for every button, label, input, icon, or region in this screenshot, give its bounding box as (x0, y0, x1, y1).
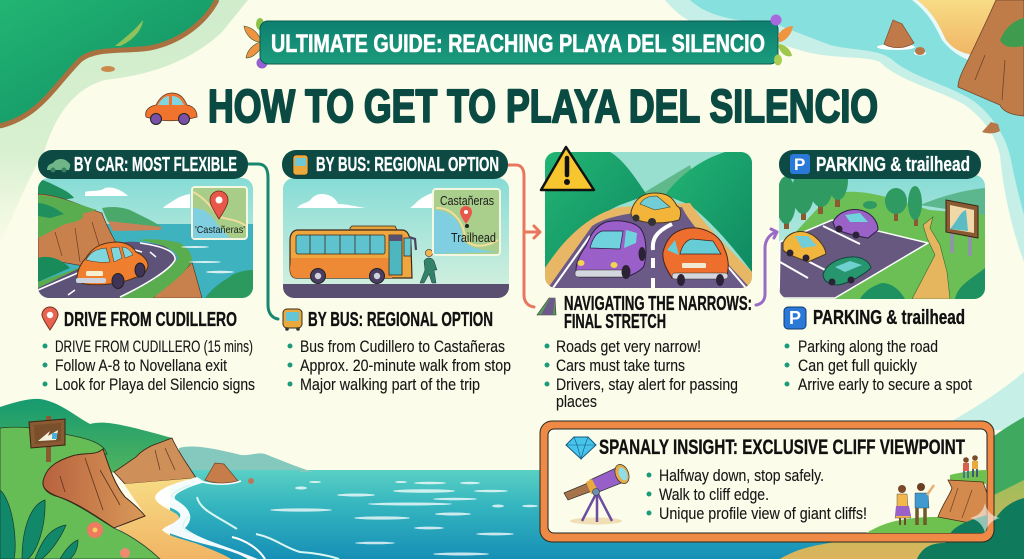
list: narrow road tips: Roads get very narrow! (556, 337, 701, 356)
list: car directions: Follow A-8 to Novellana exit (55, 356, 227, 375)
icon: road (537, 298, 556, 315)
heading: drive from cudillero: DRIVE FROM CUDILLERO (64, 308, 237, 331)
list: parking tips: Can get full quickly (798, 356, 917, 375)
panel: by car (38, 150, 255, 394)
panel: navigating the narrows (537, 147, 752, 411)
list: parking tips: Arrive early to secure a spot (798, 375, 972, 394)
parking illustration (779, 175, 985, 299)
yellow car (783, 232, 826, 262)
orange car (76, 242, 148, 288)
panel: by bus (282, 150, 511, 394)
map inset: 'Castañeras' (195, 224, 245, 236)
heading: navigating the narrows: FINAL STRETCH (564, 311, 666, 333)
list: narrow road tips: Cars must take turns (556, 356, 685, 375)
heading: parking: PARKING & trailhead (813, 306, 965, 329)
icon: parking sign (784, 307, 806, 329)
parking header pill: P (794, 155, 805, 174)
purple car (833, 210, 878, 238)
purple car (575, 221, 646, 279)
trail sign (946, 200, 978, 256)
icon: location pin (42, 307, 58, 330)
icon: telescope (564, 462, 632, 524)
by bus header pill: BY BUS: REGIONAL OPTION (316, 154, 499, 176)
bottom-right land (780, 417, 1024, 559)
list: bus directions: Major walking part of the trip (300, 375, 480, 394)
list: parking tips: Parking along the road (798, 337, 938, 356)
arrow: car to bus (248, 164, 278, 319)
list: bus directions: Approx. 20-minute walk from stop (300, 356, 511, 375)
yellow car (631, 193, 681, 226)
orange car (663, 228, 728, 286)
by car header pill (38, 150, 248, 179)
heading: navigating the narrows: NAVIGATING THE NARROWS: (564, 293, 752, 315)
map inset (192, 187, 247, 239)
icon: warning triangle (541, 147, 594, 190)
icon: orange car (146, 93, 197, 124)
list: narrow road tips: places (556, 392, 597, 411)
icon: bus (283, 309, 302, 331)
sea wave highlights (270, 481, 538, 556)
list: parking tips (784, 337, 972, 394)
map inset (433, 189, 500, 255)
parking header pill: PARKING & trailhead (816, 154, 970, 176)
list: car directions: Look for Playa del Silencio signs (55, 375, 255, 394)
list: insight tips (646, 466, 867, 523)
list: insight tips: Walk to cliff edge. (659, 485, 769, 504)
top banner (244, 14, 793, 68)
top banner: ULTIMATE GUIDE: REACHING PLAYA DEL SILENCIO (271, 30, 765, 58)
by car header pill: BY CAR: MOST FLEXIBLE (74, 154, 237, 176)
list: car directions: DRIVE FROM CUDILLERO (15 mins) (55, 337, 253, 356)
car scene illustration (38, 178, 253, 298)
heading: by bus: BY BUS: REGIONAL OPTION (308, 308, 493, 331)
green car (823, 257, 871, 286)
icon: sparkle (970, 503, 1000, 533)
icon: diamond (566, 437, 596, 459)
sea (290, 470, 1024, 559)
parking header pill (779, 150, 981, 179)
list: narrow road tips: Drivers, stay alert for passing (556, 375, 738, 394)
heading: navigating the narrows (564, 293, 752, 333)
arrow: narrows to parking (756, 229, 777, 305)
cliff viewpoint illustration (865, 470, 987, 534)
right mist above the land (950, 372, 1024, 430)
by bus header pill (282, 150, 508, 179)
narrow road illustration (545, 152, 752, 288)
map inset: Trailhead (451, 231, 496, 245)
list: insight tips: Unique profile view of giant cliffs! (659, 504, 867, 523)
top-left jungle corner (0, 0, 248, 245)
callout: insight box (540, 421, 994, 542)
list: narrow road tips (544, 337, 738, 411)
arrow: bus to narrows (508, 165, 540, 307)
map inset: Castañeras (440, 194, 494, 208)
bottom-left coast scene (0, 399, 339, 559)
list: bus directions: Bus from Cudillero to Castañeras (300, 337, 505, 356)
list: car directions (42, 337, 255, 394)
top-right sea and cliff (665, 0, 1024, 262)
bus scene illustration (283, 178, 509, 298)
icon: people at viewpoint (895, 455, 978, 525)
list: bus directions (288, 337, 511, 394)
icon: trail sign (29, 416, 65, 462)
list: insight tips: Halfway down, stop safely. (659, 466, 824, 485)
panel: parking and trailhead (776, 150, 985, 394)
icon: parking sign: P (789, 308, 801, 328)
